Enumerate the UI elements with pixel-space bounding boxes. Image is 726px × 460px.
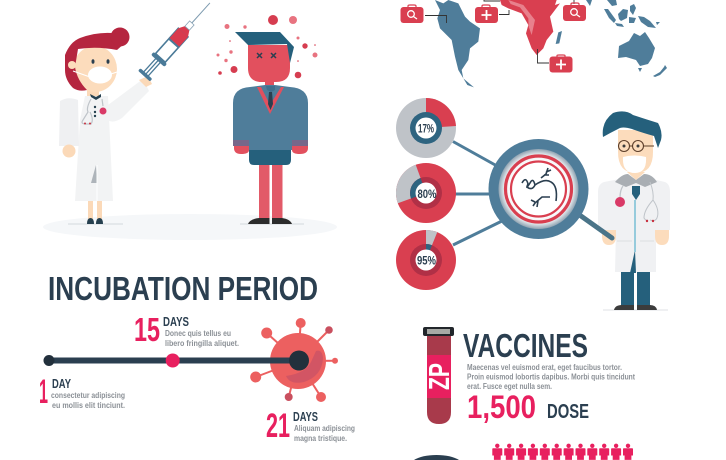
world map with medical markers	[400, 0, 667, 87]
stethoscope	[82, 94, 106, 124]
pictogram row of people	[492, 444, 633, 460]
ground shadow	[43, 214, 337, 240]
legs and shoes	[614, 268, 657, 310]
donut chart: 80%: 80%	[418, 187, 437, 201]
callout: 1 day: 1	[39, 373, 48, 411]
stat: 1,500 dose: DOSE	[547, 401, 589, 423]
virus graphic	[250, 318, 338, 402]
south america	[435, 0, 480, 87]
jacket	[233, 85, 308, 150]
callout: 21 days: 21	[266, 407, 290, 445]
icon: test tube	[423, 327, 456, 424]
callout: 1 day: eu mollis elit tinciunt.	[52, 401, 125, 410]
leader lines	[425, 0, 574, 63]
callout: 21 days: magna tristique.	[294, 434, 347, 443]
callout: 15 days: 15	[134, 311, 160, 348]
glasses	[618, 140, 654, 152]
callout: 21 days: DAYS	[293, 409, 318, 424]
virus strand	[522, 168, 556, 207]
magnifying glass with virus	[488, 139, 612, 239]
callout: 15 days	[134, 311, 239, 348]
stat: 1,500 dose: 1,500	[467, 389, 536, 425]
syringe	[137, 0, 217, 82]
icon: test tube: ZP	[424, 363, 456, 390]
head and hair	[65, 28, 130, 96]
vaccines description: Maecenas vel euismod erat, eget faucibus tortor.	[467, 363, 622, 372]
virus particles	[216, 15, 318, 78]
shorts	[249, 148, 291, 165]
donut chart: 17%: 17%	[418, 122, 434, 136]
vaccines description	[467, 363, 635, 391]
medical bag: search	[400, 5, 424, 23]
donut chart: 95%: 95%	[417, 254, 436, 268]
callout: 21 days: Aliquam adipiscing	[294, 424, 355, 433]
neck and collar	[615, 172, 657, 200]
hair	[603, 111, 662, 148]
callout: 15 days: DAYS	[163, 314, 189, 329]
white coat	[59, 79, 149, 201]
vaccines description: erat. Fusce eget nulla sem.	[467, 382, 552, 391]
callout: 1 day: consectetur adipiscing	[51, 391, 125, 400]
medical bag: search right	[563, 3, 586, 21]
illustration: female doctor with syringe	[59, 0, 217, 224]
coat	[598, 178, 670, 273]
stat: 1,500 dose	[467, 389, 589, 425]
head	[248, 45, 290, 82]
hands	[602, 230, 669, 245]
heading: vaccines: VACCINES	[463, 327, 588, 364]
crossed eyes	[257, 53, 276, 58]
africa	[500, 0, 560, 55]
vaccines description: Proin euismod lobortis dapibus. Morbi quis tincidunt	[467, 372, 635, 382]
title: incubation period: INCUBATION PERIOD	[48, 270, 318, 307]
connector lines	[453, 142, 502, 245]
neck and hands	[234, 78, 308, 154]
donut chart: 17%	[396, 98, 456, 158]
medical bag: plus bottom	[550, 55, 572, 72]
callout: 1 day	[39, 373, 125, 411]
legs and shoes	[87, 198, 103, 224]
cropped dark icon at bottom edge	[414, 455, 459, 460]
legs	[248, 165, 292, 224]
callout: 21 days	[266, 407, 355, 445]
illustration: sick man	[216, 15, 318, 224]
callout: 1 day: DAY	[52, 376, 71, 391]
medical bag: plus	[475, 5, 498, 23]
madagascar	[556, 31, 562, 44]
donut chart: 95%	[396, 230, 456, 290]
asia and oceania	[586, 0, 667, 77]
male doctor with magnifier	[598, 111, 670, 310]
callout: 15 days: libero fringilla aliquet.	[165, 339, 239, 348]
face	[618, 130, 653, 173]
hair	[235, 32, 294, 63]
mask	[623, 156, 646, 173]
stethoscope	[615, 182, 658, 222]
callout: 15 days: Donec quis tellus eu	[165, 329, 231, 338]
timeline	[44, 318, 338, 402]
donut chart: 80%	[396, 163, 456, 223]
